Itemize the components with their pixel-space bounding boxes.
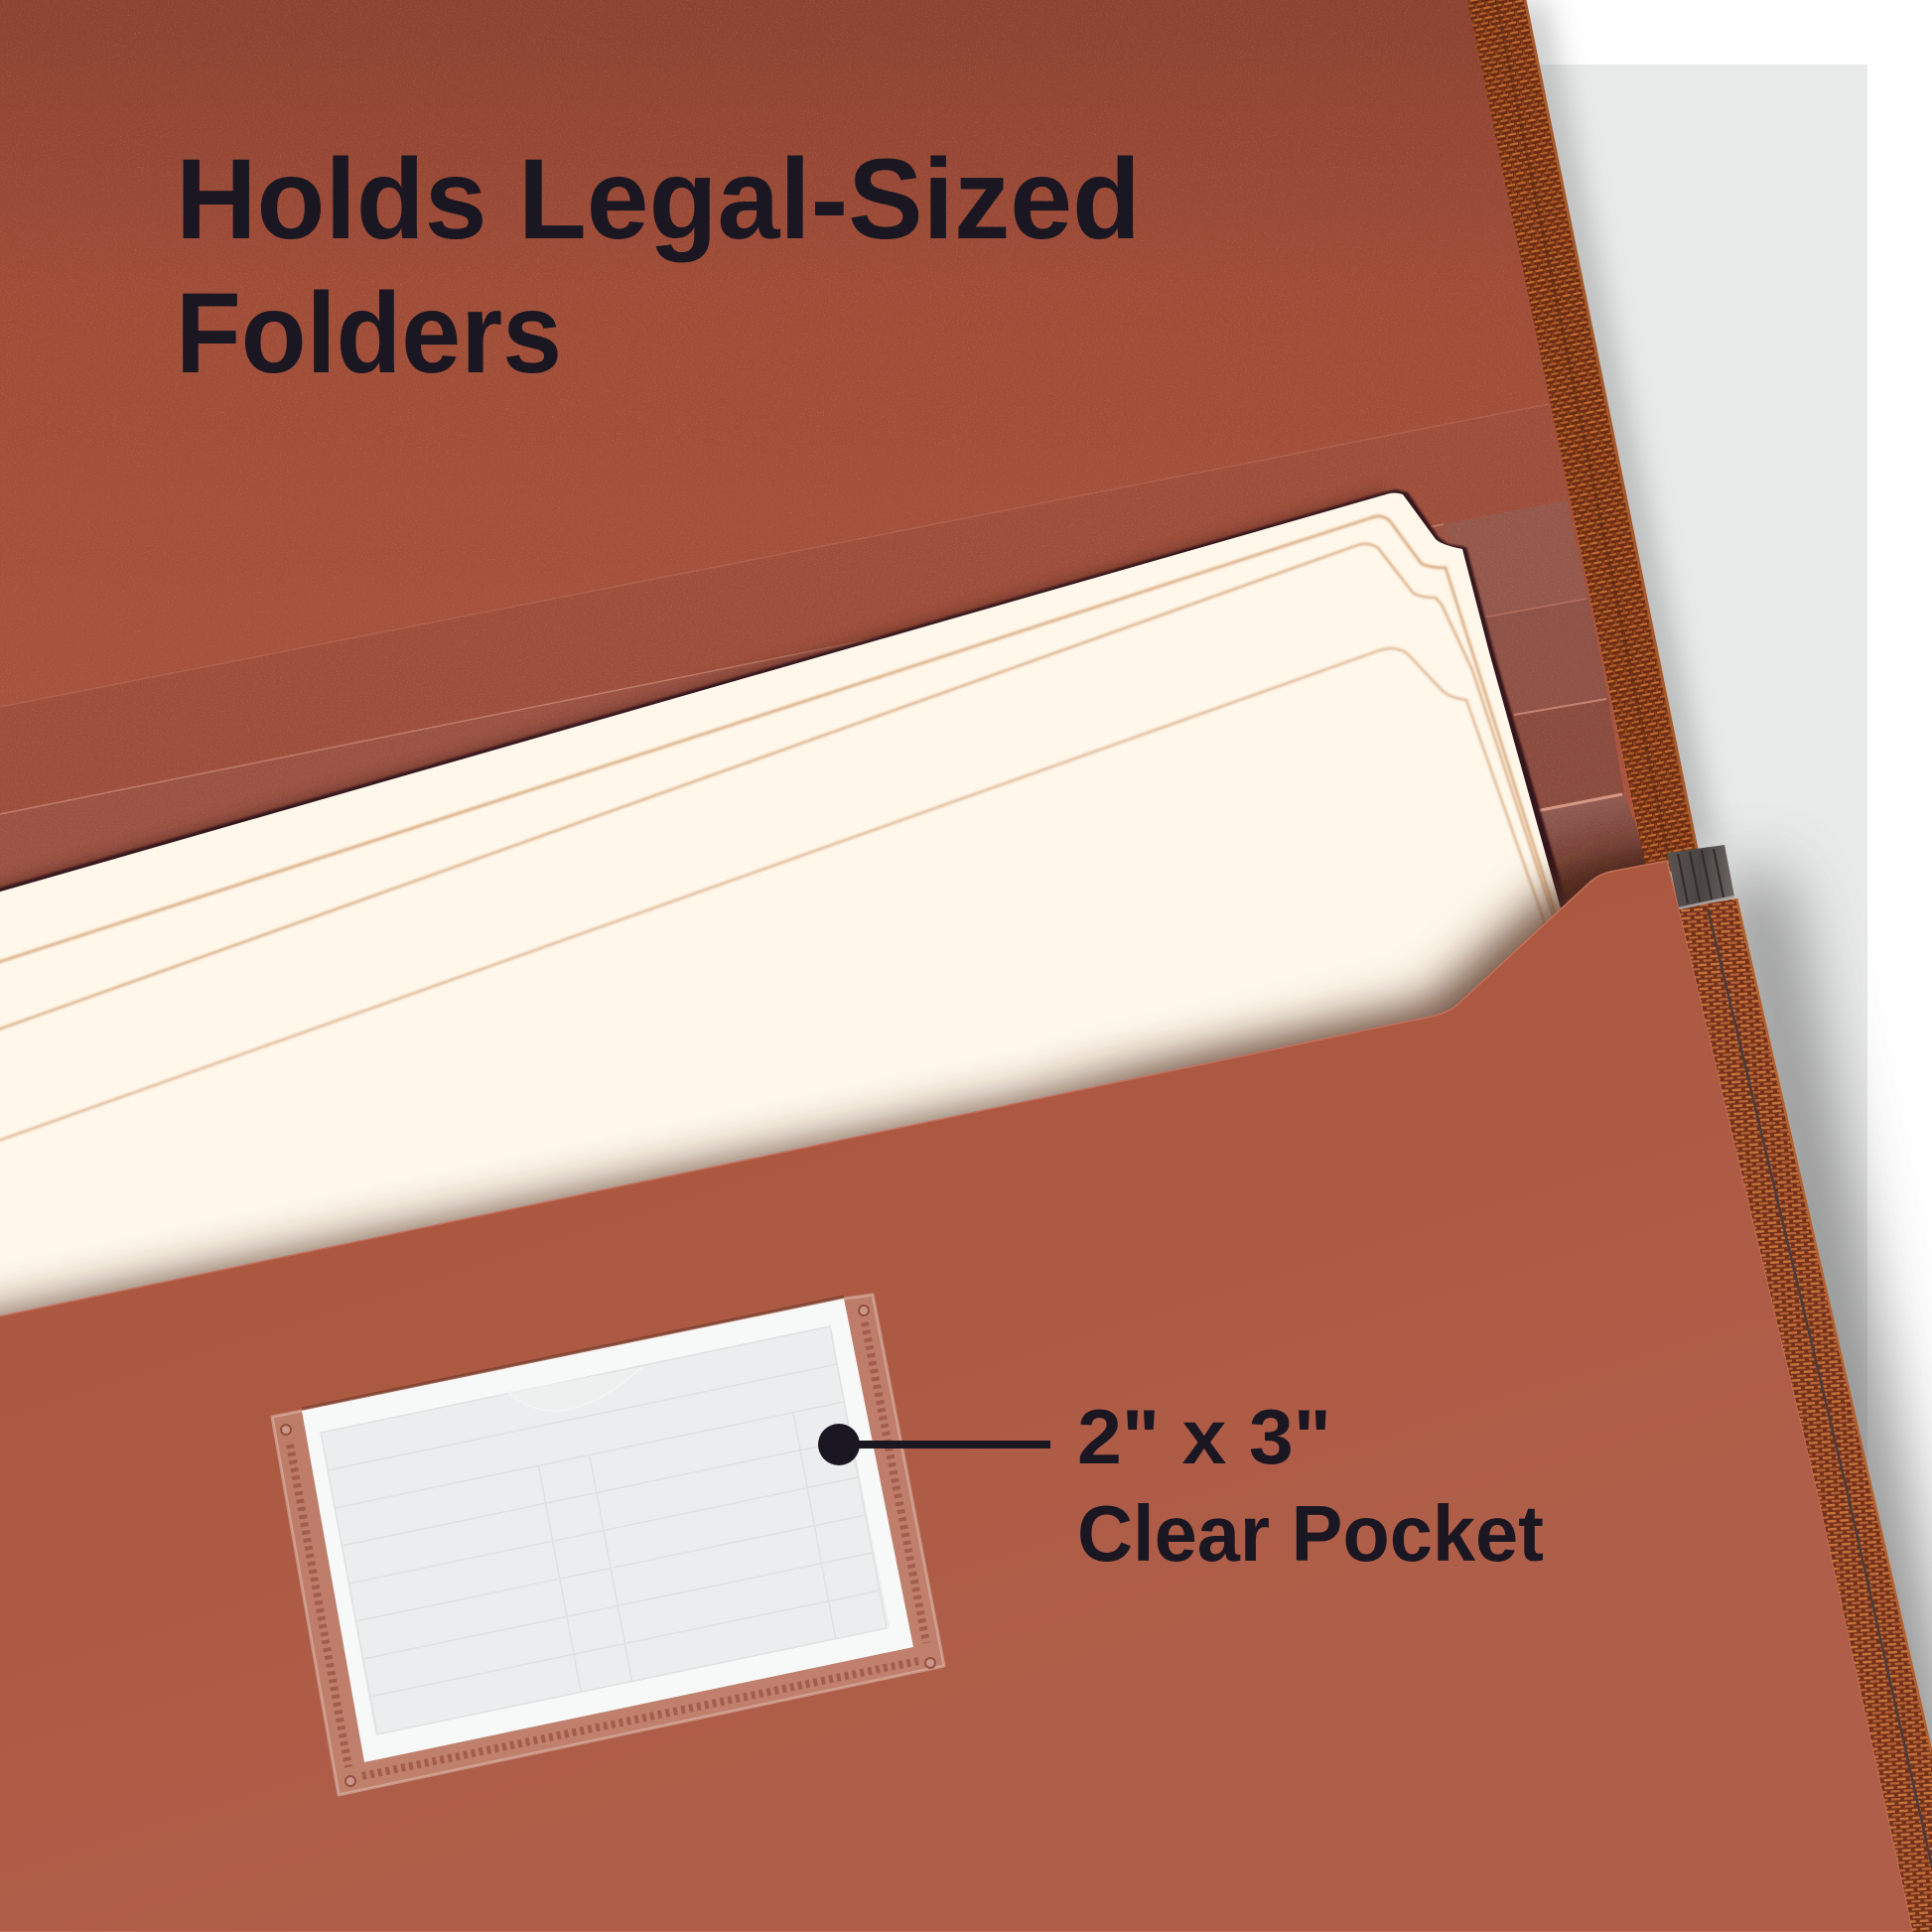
shadow of upper strap xyxy=(1514,0,1713,854)
strap edge highlight xyxy=(1525,0,1698,854)
lower crease band xyxy=(0,500,1628,993)
crease lines xyxy=(0,404,1622,814)
right side band xyxy=(1444,500,1588,618)
glitter texture xyxy=(0,0,1644,897)
grid lines xyxy=(321,1326,887,1734)
lower strap stitch line xyxy=(1708,908,1932,1866)
folder 3 xyxy=(0,544,1554,1390)
clear plastic border xyxy=(272,1295,944,1795)
callout dot and leader line xyxy=(818,1424,1050,1465)
clip ribs xyxy=(1678,849,1724,903)
metal strap clip xyxy=(1667,845,1734,908)
callout label: 2" x 3" xyxy=(1077,1393,1331,1480)
back panel of wallet xyxy=(0,0,1646,903)
shadow cast by front flap xyxy=(0,834,1645,1316)
tab shadow behind folders xyxy=(0,489,1569,1390)
grey ruled grid xyxy=(321,1326,890,1734)
title xyxy=(176,136,1141,397)
right side lower band xyxy=(1483,599,1608,715)
lower elastic strap xyxy=(1679,898,1932,1932)
callout label: Clear Pocket xyxy=(1077,1489,1544,1578)
shadow of lower strap xyxy=(1723,874,1932,1932)
folder 2 xyxy=(0,516,1557,1390)
bottom dark band xyxy=(1536,794,1653,933)
front pocket flap xyxy=(0,861,1913,1932)
clip bottom edge xyxy=(1679,897,1734,908)
perforated seam xyxy=(290,1322,926,1776)
folder 1 xyxy=(0,492,1561,1390)
white label card xyxy=(302,1299,913,1762)
deeper shadow near flap notch xyxy=(1042,889,1628,1102)
lower strap edge highlight xyxy=(1736,898,1932,1754)
clear 2x3 pocket xyxy=(272,1295,944,1795)
title: Holds Legal-Sized xyxy=(176,136,1141,263)
soft shade along folder edge xyxy=(0,496,1386,897)
corner eyelets xyxy=(281,1306,935,1786)
strap stitch line xyxy=(1496,0,1668,854)
callout label xyxy=(1077,1393,1544,1578)
folder 4 front xyxy=(0,648,1545,1390)
card top edge shadow xyxy=(302,1297,844,1409)
fold band xyxy=(0,404,1588,993)
right side third band xyxy=(1514,699,1624,811)
upper elastic strap xyxy=(1467,0,1700,878)
manila folders xyxy=(0,488,1645,1316)
grey backdrop panel xyxy=(1489,65,1867,1932)
title: Folders xyxy=(176,270,562,397)
thumb notch xyxy=(507,1367,642,1411)
